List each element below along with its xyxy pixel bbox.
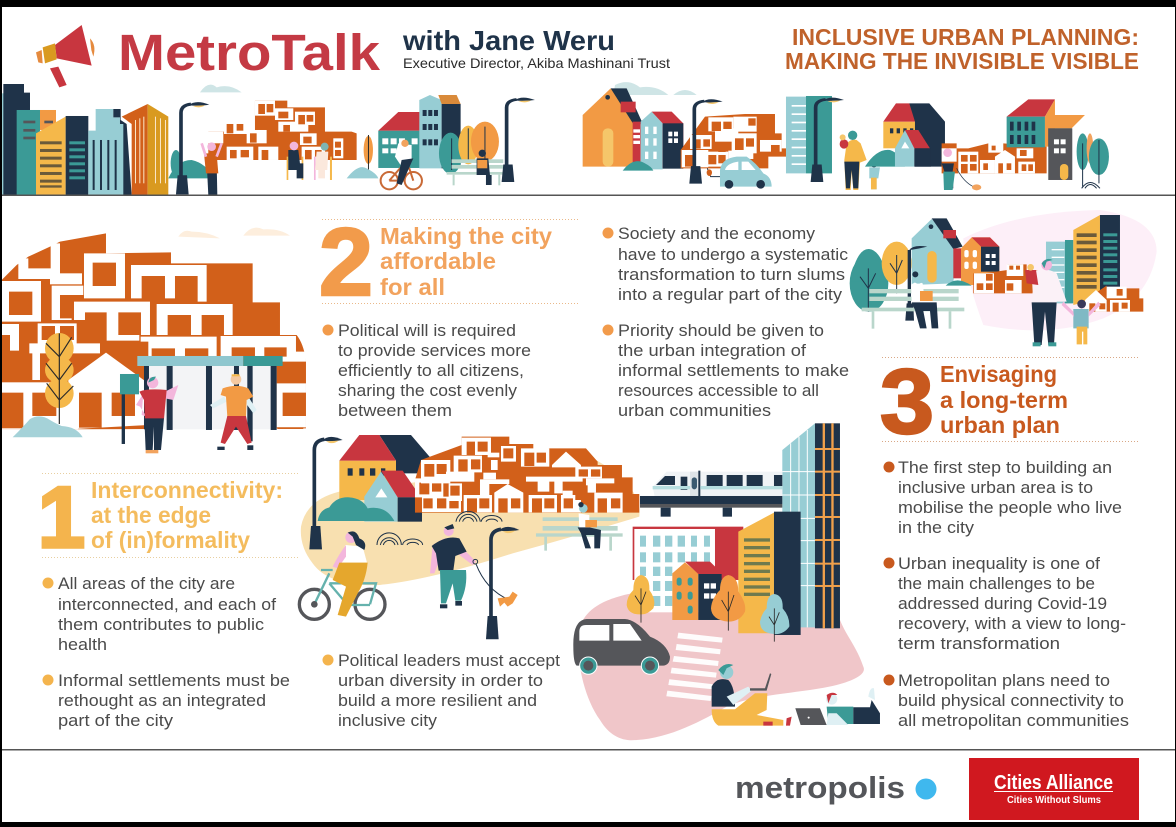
footer rule <box>2 749 1175 750</box>
people at bus stop <box>136 374 257 453</box>
number 2: 2 <box>319 209 373 316</box>
bullet text: first step: The first step to building an <box>898 458 1112 477</box>
bullet text: interconnected areas: All areas of the city are <box>58 574 235 593</box>
heading 1: at the edge <box>91 502 211 528</box>
heading 1 <box>91 477 283 553</box>
illustration: section 3 park and family <box>850 210 1157 346</box>
bullet text: political leaders: inclusive city <box>338 711 438 730</box>
bullet text: interconnected areas: them contributes to public <box>58 615 265 634</box>
bullet text: political leaders: build a more resilient and <box>338 691 537 710</box>
illustration: transit, towers and square <box>573 423 880 740</box>
icon: megaphone <box>36 25 94 87</box>
title: INCLUSIVE URBAN PLANNING: <box>792 24 1139 50</box>
bullet text: political will: efficiently to all citizens, <box>338 361 524 380</box>
bullet text: urban inequality: term transformation <box>898 634 1060 653</box>
bullet text: systematic transformation: into a regular part of the city <box>618 285 843 304</box>
bullet text: informal settlements <box>42 671 290 730</box>
bullet text: urban inequality <box>884 554 1126 653</box>
bullet text: interconnected areas: interconnected, and each of <box>58 595 276 614</box>
bullet text: urban integration: Priority should be given to <box>618 321 824 340</box>
bullet text: metropolitan plans: Metropolitan plans need to <box>898 671 1110 690</box>
guest name and role: Executive Director, Akiba Mashinani Trust <box>403 55 670 71</box>
bullet text: first step <box>884 458 1122 537</box>
guest name and role <box>402 25 670 71</box>
bullet text: political will: sharing the cost evenly <box>338 381 518 400</box>
bullet text: systematic transformation <box>602 224 849 304</box>
illustration: center neighbourhood with cyclist and walker <box>299 435 640 639</box>
dotted rules <box>42 474 298 558</box>
bullet text: interconnected areas <box>42 574 276 654</box>
Cities Alliance logo <box>969 758 1139 820</box>
bullet text: political leaders: Political leaders must accept <box>338 651 560 670</box>
heading 3: Envisaging <box>940 361 1057 387</box>
bullet text: urban inequality: recovery, with a view to long- <box>898 614 1126 633</box>
bullet text: first step: mobilise the people who live <box>898 498 1122 517</box>
header rule <box>2 194 1175 196</box>
bullet text: urban integration: resources accessible to all <box>618 381 819 400</box>
bullet text: urban inequality: the main challenges to be <box>898 574 1095 593</box>
dotted rules <box>882 358 1138 442</box>
Cities Alliance logo: Cities Alliance <box>994 772 1113 794</box>
header illustration: houses and cyclist <box>378 95 535 189</box>
Cities Alliance logo: Cities Without Slums <box>1007 795 1101 806</box>
number 1: 1 <box>38 470 85 566</box>
header illustration: people and settlement left <box>168 101 378 195</box>
bullet text: political will: between them <box>338 401 452 420</box>
header illustration: center right houses and car <box>583 82 844 189</box>
bullet text: metropolitan plans: all metropolitan communities <box>898 711 1129 730</box>
header illustration: family and houses right <box>840 99 1109 190</box>
heading 3: a long-term <box>940 387 1068 413</box>
bullet text: urban integration: the urban integration of <box>618 341 806 360</box>
bullet text: political leaders: urban diversity in order to <box>338 671 543 690</box>
heading 2: Making the city <box>380 223 552 249</box>
bullet text: systematic transformation: Society and the economy <box>618 224 816 243</box>
bullet text: urban integration: informal settlements to make <box>618 361 849 380</box>
illustration: left settlement and bus stop <box>2 228 306 444</box>
bullet text: informal settlements: rethought as an integrated <box>58 691 266 710</box>
bullet text: urban inequality: addressed during Covid-19 <box>898 594 1107 613</box>
bullet text: political leaders <box>322 651 560 730</box>
bullet text: political will: Political will is required <box>338 321 516 340</box>
metropolis logo: metropolis <box>735 770 905 805</box>
bullet text: systematic transformation: transformation to turn slums <box>618 265 845 284</box>
number 3: 3 <box>880 351 934 453</box>
heading 1: of (in)formality <box>91 527 250 553</box>
header illustration: city skyline left <box>2 84 242 195</box>
bullet text: informal settlements: Informal settlements must be <box>58 671 290 690</box>
bullet text: political will: to provide services more <box>338 341 531 360</box>
bullet text: metropolitan plans <box>884 671 1129 730</box>
heading 2: affordable <box>380 248 496 274</box>
bullet text: informal settlements: part of the city <box>58 711 174 730</box>
logo wordmark: MetroTalk <box>118 24 381 81</box>
bullet text: systematic transformation: have to undergo a systematic <box>618 245 849 264</box>
bullet text: political will <box>322 321 531 420</box>
bullet text: first step: inclusive urban area is to <box>898 478 1093 497</box>
heading 3: urban plan <box>940 412 1060 438</box>
heading 2 <box>380 223 552 300</box>
bullet text: urban integration: urban communities <box>618 401 771 420</box>
section 3 <box>880 351 1138 730</box>
bullet text: metropolitan plans: build physical connectivity to <box>898 691 1124 710</box>
title: MAKING THE INVISIBLE VISIBLE <box>785 48 1139 74</box>
bullet text: urban inequality: Urban inequality is one of <box>898 554 1100 573</box>
heading 2: for all <box>380 274 445 300</box>
guest name and role: with Jane Weru <box>402 25 615 56</box>
section 1 <box>38 470 298 730</box>
heading 3 <box>940 361 1068 438</box>
header: MetroTalk logo <box>36 24 381 87</box>
bullet text: first step: in the city <box>898 518 975 537</box>
heading 1: Interconnectivity: <box>91 477 283 503</box>
dotted rules <box>322 220 578 304</box>
bullet text: interconnected areas: health <box>58 635 107 654</box>
bullet text: urban integration <box>602 321 849 420</box>
section 2 <box>319 209 849 730</box>
title <box>785 24 1139 74</box>
